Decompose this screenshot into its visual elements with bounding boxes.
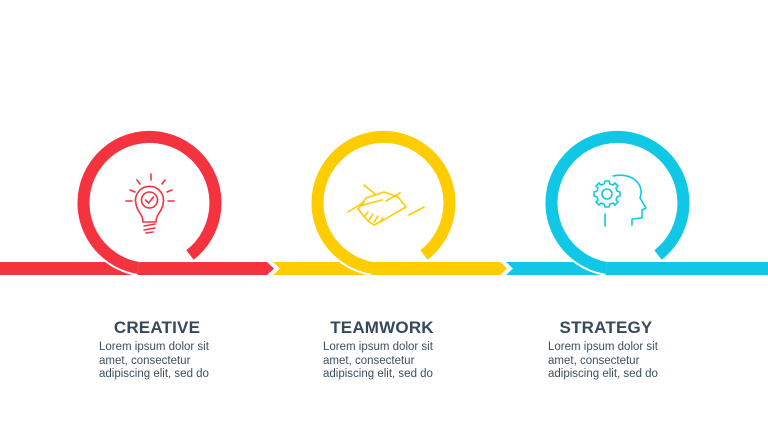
icon: head with gear — [594, 175, 646, 226]
text block: creative: CREATIVE — [114, 318, 200, 337]
bar: yellow — [273, 262, 507, 275]
bar: blue — [506, 262, 768, 275]
loop: yellow — [317, 137, 449, 268]
text block: creative: Lorem ipsum dolor sit amet, consectetur adipiscing elit, sed do — [99, 341, 209, 380]
loop: red — [83, 137, 215, 268]
text block: teamwork: TEAMWORK — [330, 318, 434, 337]
text block: strategy: STRATEGY — [560, 318, 652, 337]
text block: teamwork — [323, 318, 434, 380]
loop: blue — [551, 137, 683, 268]
text block: strategy — [548, 318, 658, 380]
text block: strategy: Lorem ipsum dolor sit amet, consectetur adipiscing elit, sed do — [548, 341, 658, 380]
text block: creative — [99, 318, 209, 380]
icon: lightbulb — [126, 174, 174, 233]
icon: handshake — [348, 185, 424, 225]
text block: teamwork: Lorem ipsum dolor sit amet, consectetur adipiscing elit, sed do — [323, 341, 433, 380]
bar: red — [0, 262, 274, 275]
